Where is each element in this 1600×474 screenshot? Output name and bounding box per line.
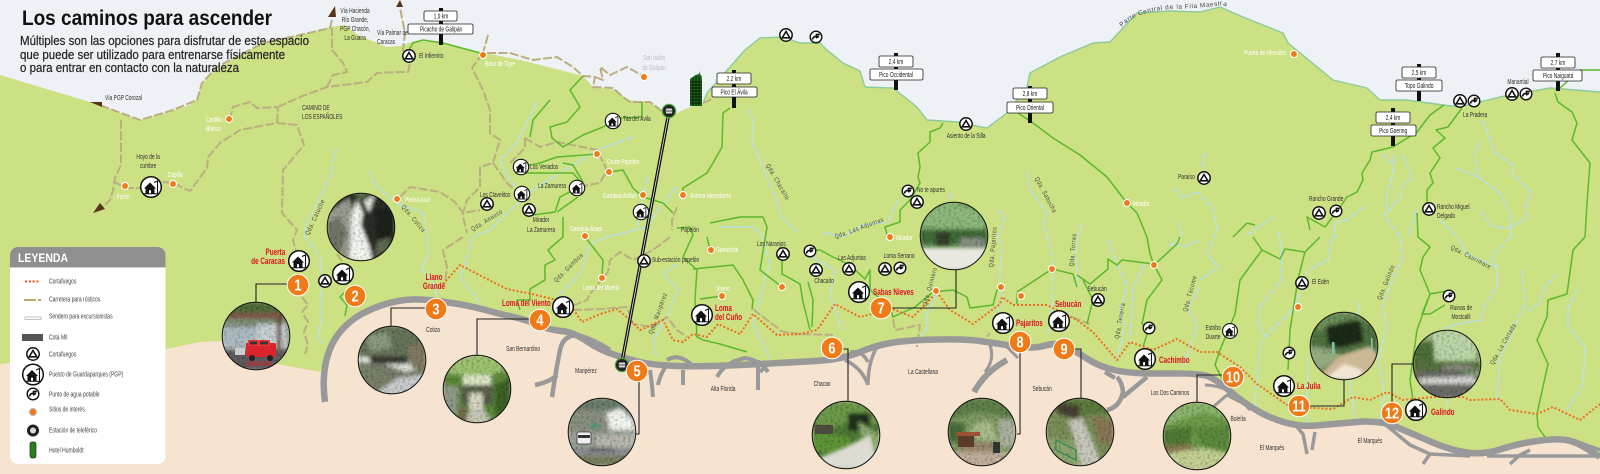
text labels: places: Chacao <box>814 380 831 388</box>
river labels <box>305 163 1519 366</box>
text labels: places: Asiento de la Silla <box>947 132 986 140</box>
photo 1: Puerta de Caracas <box>222 302 290 370</box>
text labels: places: No te apures <box>917 186 945 194</box>
text labels: places: Rancho Miguel <box>1437 203 1470 211</box>
subtitle text block <box>20 34 309 75</box>
icons: water taps <box>804 31 1532 359</box>
text labels: places: LOS ESPAÑOLES <box>302 113 342 121</box>
number badge 11 <box>1288 395 1310 417</box>
text labels: places: El Edén <box>1312 278 1330 286</box>
subtitle text block: que puede ser utilizado para entrenarse físicamente <box>20 48 285 62</box>
rustic roads (brown dashed) <box>100 8 1090 354</box>
text labels: places: La Zamurera <box>538 182 566 190</box>
number badge 3: 3 <box>432 301 440 319</box>
text labels: places: Boca de Tigre <box>485 60 516 68</box>
number badge 5 <box>626 360 648 382</box>
text labels: places: La Zamurera <box>527 226 556 234</box>
icons: ranger huts <box>141 113 1426 420</box>
photo 4: Loma del Viento <box>443 355 511 423</box>
legend panel: Estación de teleférico <box>49 427 97 435</box>
photo 11: La Julia <box>1310 312 1378 380</box>
rivers (quebradas) <box>305 102 1585 424</box>
text labels: places: Gamelotal <box>716 246 738 254</box>
text labels: places: Vía PGP Corozal <box>105 94 142 102</box>
river labels: Qda. Tácome <box>1183 275 1199 313</box>
text labels: places: La Pradera <box>1463 111 1488 119</box>
number badge 5: 5 <box>633 363 641 381</box>
text labels: places: Chacaíto <box>814 277 834 285</box>
sign: Pico Occidental <box>870 53 923 90</box>
number badge 12 <box>1381 402 1403 424</box>
text labels: places: La Guaira <box>344 34 366 42</box>
ridge label: Parte Central de la Fila Maestra: Parte Central de la Fila Maestra <box>1119 1 1227 27</box>
cable car line <box>622 112 669 362</box>
photo 10: Los Dos Caminos <box>1163 402 1231 470</box>
text labels: places: San Bernardino <box>506 345 541 353</box>
legend panel: Sendero para excursionistas <box>49 313 113 321</box>
text labels: places: Sebucán <box>1087 285 1107 293</box>
sign: Pico Goering <box>1371 108 1416 146</box>
number badge 8: 8 <box>1016 334 1024 352</box>
text labels: places: Gamboa Arriba <box>603 192 636 200</box>
sign: Pico Goering: Pico Goering <box>1379 127 1408 135</box>
red access-point labels: Loma del Viento <box>502 298 551 308</box>
red access-point labels <box>251 247 1455 417</box>
text labels: places: Vía Hacienda <box>340 7 370 15</box>
text labels: places: Mirador <box>1133 200 1150 208</box>
icon: lower cable car station <box>615 358 629 372</box>
sign: Pico Oriental: Pico Oriental <box>1016 104 1044 112</box>
red access-point labels: Galindo <box>1431 407 1455 417</box>
text labels: places: Blanco <box>206 125 221 133</box>
photo: waterfall <box>327 193 395 261</box>
text labels: places: Loma Serrano <box>884 252 915 260</box>
text labels: places: Gamboa Abajo <box>570 225 603 233</box>
legend panel: Cortafuegos <box>49 278 76 286</box>
river labels: Qda. Caurimare <box>1449 245 1492 271</box>
legend panel: Carretera para rústicos <box>49 296 100 304</box>
connector lines for photos <box>256 270 1413 434</box>
text labels: places: San Isidro <box>643 54 666 62</box>
photo 12: Galindo <box>1413 330 1481 398</box>
text labels: places: Duarte <box>1206 333 1221 341</box>
river labels: Qda. Chacaíto <box>764 163 790 202</box>
text labels: places: Las Adjuntas <box>838 254 866 262</box>
red access-point labels: La Julia <box>1297 381 1321 391</box>
sign: Pico Naiguatá: Pico Naiguatá <box>1543 72 1574 80</box>
Cota Mil highway and branches <box>324 299 1600 464</box>
photo 6: Chacao <box>812 401 880 469</box>
river labels: Qda. Galindo <box>1377 264 1397 301</box>
river labels: Qda. Cotiza <box>399 204 426 234</box>
number badge 2: 2 <box>351 288 359 306</box>
text labels: places: Río Grande, <box>342 16 369 24</box>
icon: Hotel Humboldt <box>690 71 702 106</box>
text labels: places: Los Naranjos <box>757 240 786 248</box>
river labels: Qda. Quintero <box>922 267 939 307</box>
text labels: places: Hoyo de la <box>136 153 160 161</box>
text labels: places: El Marqués <box>1260 444 1284 452</box>
sign: Picacho de Galipán: Picacho de Galipán <box>420 26 463 34</box>
icons: firebreak tents <box>319 29 1518 306</box>
red access-point labels: Puerta <box>266 247 286 257</box>
text labels: places: PGP Chacón, <box>340 25 370 33</box>
text labels: places: Los Dos Caminos <box>1151 389 1189 397</box>
text labels: places: Castillo <box>206 116 222 124</box>
text labels: places: Sub-estación papelón <box>652 256 700 264</box>
text labels: places: Vivero <box>716 285 730 293</box>
text labels: places: Puerta de Hércules <box>1244 49 1286 57</box>
photo 3: Llano Grande <box>358 326 426 394</box>
text labels: places: El Infiernito <box>419 52 444 60</box>
sign: Pico El Ávila <box>712 70 757 108</box>
river labels: Qda. Torres <box>1069 233 1079 267</box>
map terrain: beige city area <box>0 300 1600 474</box>
sign: Pico El Ávila: Pico El Ávila <box>721 89 748 97</box>
legend panel: Puesto de Guardaparques (PGP) <box>49 371 123 379</box>
legend heading: LEYENDA <box>18 251 68 265</box>
sign: Topo Galindo <box>1396 64 1442 101</box>
photo 7: Sabas Nieves <box>920 202 988 270</box>
number badge 1 <box>287 274 309 296</box>
text labels: places: Los Clavelitos <box>480 191 510 199</box>
number badge 8 <box>1009 331 1031 353</box>
number badge 9: 9 <box>1060 341 1068 359</box>
text labels: places: Piedra Azul <box>405 196 430 204</box>
number badge 10: 10 <box>1226 369 1240 387</box>
text labels: places: Capilla <box>168 171 183 179</box>
number badge 6: 6 <box>828 340 836 358</box>
number badge 9 <box>1053 338 1075 360</box>
number badge 4 <box>529 309 551 331</box>
sign: Pico Occidental: 2,4 km <box>889 58 903 66</box>
photo 8: Pajaritos <box>948 398 1016 466</box>
sites of interest (orange dots) <box>122 50 1302 310</box>
text labels: places: Mirador <box>896 234 913 242</box>
ridge line <box>703 7 1600 128</box>
river labels: Qda. Las Adjuntas <box>834 217 885 241</box>
photo 5: Maripérez station <box>568 398 636 466</box>
road arrows <box>90 0 403 213</box>
text labels: places: Papelón <box>681 226 699 234</box>
river labels: Qda. Tenería <box>1114 302 1127 339</box>
river labels: Qda. Catuche <box>305 199 327 236</box>
icon: upper cable car station <box>662 104 676 118</box>
number badge 4: 4 <box>536 312 544 330</box>
text labels: places: Delgado <box>1437 212 1456 220</box>
text labels: places: Cruce Papelón <box>607 158 640 166</box>
text labels: places: cumbre <box>140 162 157 170</box>
red access-point labels: Sabas Nieves <box>873 287 914 297</box>
subtitle text block: o para entrar en contacto con la naturaleza <box>20 61 239 75</box>
sign: Pico Naiguatá: 2,7 km <box>1551 59 1565 67</box>
red access-point labels: Pajaritos <box>1016 318 1043 328</box>
number badge 2 <box>344 285 366 307</box>
sign: Pico Naiguatá <box>1533 53 1582 91</box>
text labels: places: Mirador <box>533 216 549 224</box>
red access-point labels: Cachimbo <box>1159 355 1190 365</box>
river labels: Qda. Sabucha <box>1033 176 1057 215</box>
text labels: places: Estribo <box>1206 324 1221 332</box>
sign: Pico Oriental: 2,8 km <box>1023 90 1037 98</box>
text labels: places: La Castellana <box>908 368 938 376</box>
text labels: places: Caracas <box>377 38 395 46</box>
title: Los caminos para ascender <box>22 7 272 30</box>
number badge 10 <box>1222 366 1244 388</box>
text labels: places: El Marqués <box>1358 437 1382 445</box>
legend panel: Cota Mil <box>49 334 67 342</box>
red access-point labels: del Cuño <box>715 312 742 322</box>
legend panel: Sitios de interés <box>49 406 85 414</box>
text labels: places: Boleíta <box>1231 415 1246 423</box>
red access-point labels: Loma <box>715 303 732 313</box>
sign: Picacho de Galipán: 1,9 km <box>434 13 448 21</box>
sign: Topo Galindo: 2,5 km <box>1412 69 1426 77</box>
sign: Pico El Ávila: 2,2 km <box>727 75 741 83</box>
legend panel: Punto de agua potable <box>49 391 100 399</box>
sign: Topo Galindo: Topo Galindo <box>1405 82 1434 90</box>
text labels: places: Vía Palmar de <box>377 29 408 37</box>
text labels: places: de Galipán <box>642 64 666 72</box>
sign: Pico Occidental: Pico Occidental <box>879 71 913 79</box>
number badge 7 <box>870 297 892 319</box>
text labels: places: Antena Mecedores <box>690 192 731 200</box>
text labels: places: Cotiza <box>426 326 440 334</box>
firebreak (orange dotted) <box>443 265 1600 420</box>
text labels: places: Los Venados <box>530 163 558 171</box>
number badge 1: 1 <box>294 277 302 295</box>
text labels: places: Sebucán <box>1032 385 1052 393</box>
river labels: Qda. Maripérez <box>648 292 670 335</box>
sign: Picacho de Galipán <box>408 8 473 45</box>
text labels: places: Alta Florida <box>711 385 736 393</box>
text labels: places: Paraíso <box>1178 173 1195 181</box>
number badge 12: 12 <box>1385 405 1399 423</box>
text labels: places: Rancho Grande <box>1309 195 1344 203</box>
legend panel: Cortafuegos <box>49 351 76 359</box>
text labels: places: Tita del Ávila <box>623 115 651 123</box>
text labels: places: Loma del Muerto <box>583 284 620 292</box>
hiking trails (green) <box>340 40 1600 437</box>
photo 9: Sebucán <box>1046 398 1114 466</box>
red access-point labels: Sebucán <box>1055 299 1082 309</box>
sign: Pico Oriental <box>1007 86 1053 123</box>
river labels: Qda. Pajaritos <box>989 226 999 268</box>
legend panel: Hotel Humboldt <box>49 447 84 455</box>
river labels: Qda. Gamboa <box>553 252 585 284</box>
number badge 11: 11 <box>1292 398 1306 416</box>
number badge 3 <box>425 298 447 320</box>
text labels: places: Mostcalli <box>1452 313 1470 321</box>
text labels: places: Maripérez <box>575 367 597 375</box>
legend panel <box>10 247 166 464</box>
text labels: places: Manantial <box>1507 78 1529 86</box>
text labels: places: Fortín <box>117 193 130 201</box>
river labels: Qda. Anauco <box>470 209 504 233</box>
red access-point labels: Llano <box>426 272 443 282</box>
number badge 6 <box>821 337 843 359</box>
text labels: places: Ruinas de <box>1450 304 1473 312</box>
sign: Pico Goering: 2,4 km <box>1386 114 1400 122</box>
red access-point labels: Grande <box>423 281 445 291</box>
subtitle text block: Múltiples son las opciones para disfrutar de este espacio <box>20 34 309 48</box>
text labels: places: CAMINO DE <box>302 104 330 112</box>
river labels: Qda. La Cortada <box>1489 323 1519 366</box>
red access-point labels: de Caracas <box>251 256 285 266</box>
number badge 7: 7 <box>877 300 885 318</box>
